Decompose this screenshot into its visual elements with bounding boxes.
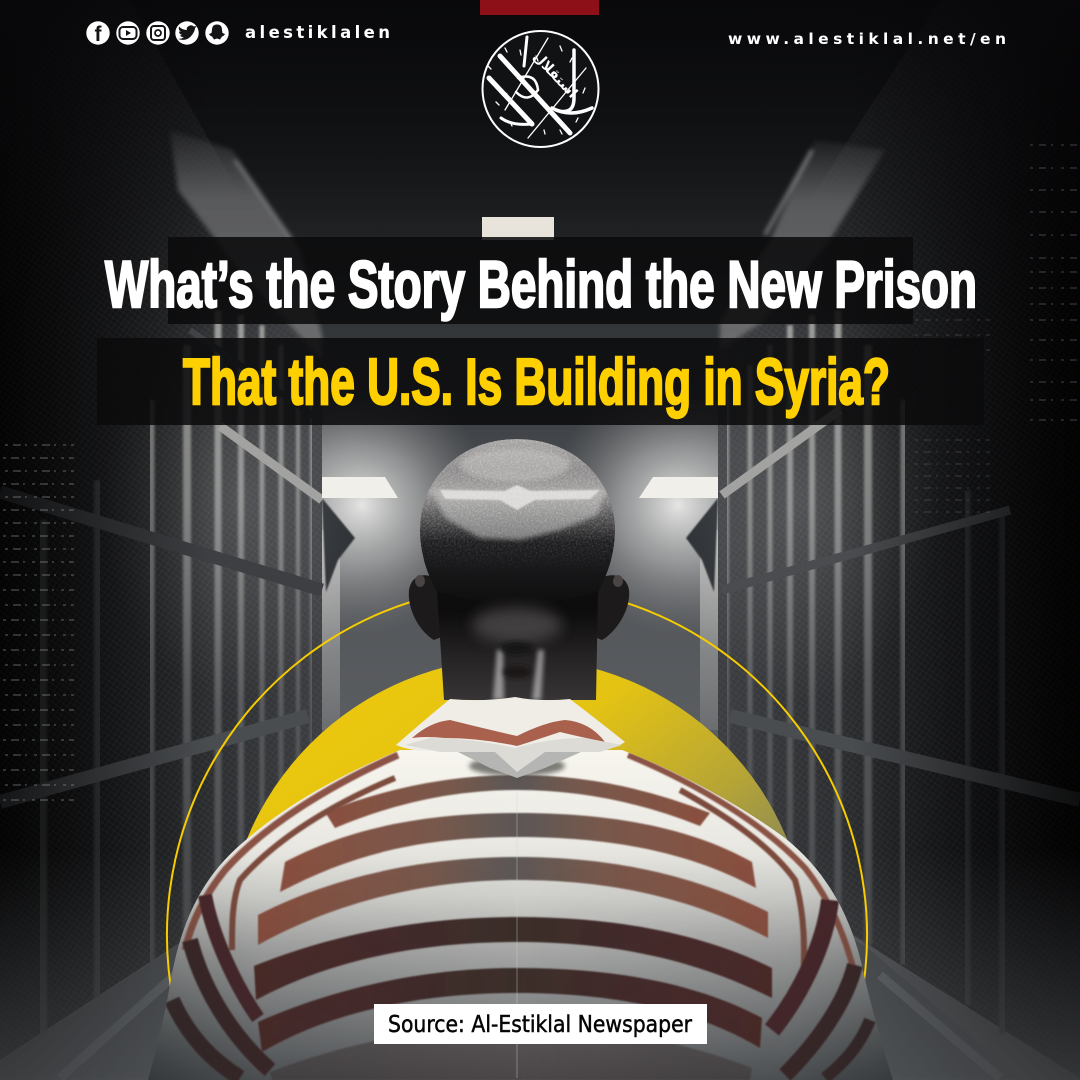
ears: [409, 575, 629, 640]
logo wordmark: استقلال: [530, 49, 580, 102]
title panel: line one: [105, 237, 977, 324]
website url: www.alestiklal.net/en: [728, 30, 1006, 48]
ceiling beams: [171, 132, 883, 338]
left cell wall: [0, 58, 344, 1060]
icon: facebook: f: [94, 23, 102, 46]
source label: Source: Al-Estiklal Newspaper: [388, 1012, 692, 1038]
centre seam: [516, 790, 518, 1078]
right corridor light: [639, 477, 718, 498]
striped shirt: [140, 745, 910, 1080]
prisoner figure: [140, 439, 910, 1080]
yellow half disc: [225, 658, 809, 950]
hood collar: [396, 697, 625, 778]
back stripes: [254, 775, 772, 1080]
newspaper texture right: [915, 145, 1080, 512]
social icons and handle: [86, 21, 390, 46]
handle: alestiklalen: [245, 23, 390, 42]
calligraphy strokes: [488, 37, 592, 138]
right cell wall: [697, 64, 1080, 1062]
icon: twitter: [175, 21, 199, 45]
top red tab: [480, 0, 599, 15]
icon: youtube: [116, 21, 140, 45]
head and neck: [420, 439, 615, 700]
title panel: line two: [97, 338, 984, 425]
logo: Al-Estiklal roundel: [482, 31, 598, 147]
neck shadow on shirt: [469, 756, 565, 776]
shoulder and sleeve stripes: [172, 755, 870, 1078]
icon: snapchat: [205, 21, 229, 45]
icon: instagram: [146, 21, 170, 45]
ceiling light: [482, 217, 554, 240]
icon: facebook: [86, 21, 110, 46]
left corridor light: [322, 477, 398, 498]
floor: [119, 940, 938, 1028]
corridor wall glow and columns: [322, 425, 718, 730]
source label: [374, 1004, 707, 1044]
newspaper texture left: [3, 445, 74, 800]
thin yellow arc: [167, 585, 867, 1005]
